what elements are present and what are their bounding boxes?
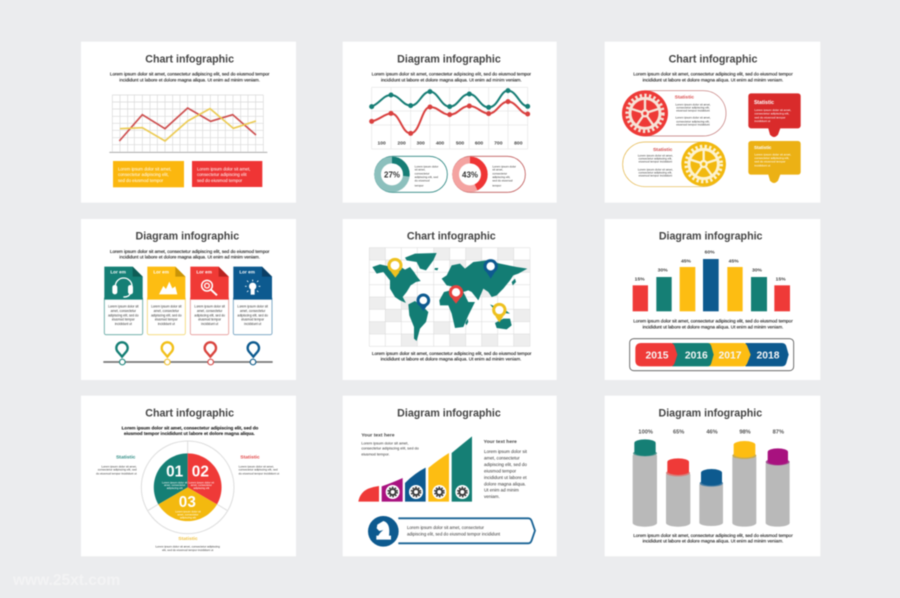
callout: red text box: sed do eiusmod tempor (197, 178, 243, 183)
segmented pie chart: amet, consectetur (191, 483, 212, 487)
cylinder chart: 46% (706, 429, 718, 435)
callout: yellow text box (113, 161, 184, 187)
card: red magnifier: Lorem ipsum dolor sit (194, 305, 225, 309)
card: teal headset: incididunt ut (115, 322, 132, 326)
card: blue light bulb: adipiscing elit, sed do (237, 313, 268, 317)
map pin: blue south america (418, 295, 429, 311)
card: red magnifier (190, 267, 229, 335)
text block: left (361, 433, 419, 456)
text block: right: Your text here (484, 439, 517, 445)
callout: red speech box: Lorem ipsum dolor sit amet, (754, 108, 791, 112)
donut pill: 27%: consectetur (415, 171, 429, 175)
intro text (633, 533, 793, 544)
card: blue light bulb: Lor em (239, 270, 255, 275)
card: teal headset: amet, consectetur (111, 309, 137, 313)
year timeline bar: 2017 (719, 351, 742, 362)
title: Diagram infographic (659, 408, 762, 420)
cylinder chart: 87% (773, 429, 784, 435)
donut pill: 43%: 43% (462, 171, 478, 180)
donut pill: 27%: 27% (384, 171, 400, 180)
statistic pill with yellow gear: eiusmod tempor incididunt (639, 160, 672, 164)
donut pill: 43%: adipiscing elit, (492, 175, 510, 179)
line chart (109, 95, 267, 152)
bar chart (633, 250, 790, 311)
stepped bars (358, 436, 472, 502)
intro text (633, 72, 793, 82)
callout: yellow text box: consectetur adipiscing elit, (118, 172, 169, 177)
card: blue light bulb (233, 267, 272, 335)
statistic pill with yellow gear: Lorem ipsum dolor sit amet, (638, 167, 673, 171)
card: blue light bulb: incididunt ut (244, 322, 261, 326)
bar chart: 45% (729, 259, 739, 265)
panel: bar chart and years slide (605, 219, 820, 380)
smooth line chart: 400 (436, 140, 444, 146)
callout: red text box: consectetur adipiscing elit (197, 172, 247, 177)
text pill with knight icon (368, 516, 535, 547)
statistic pill with yellow gear: Lorem ipsum dolor sit amet, (638, 154, 673, 158)
label: yellow statistic: Lorem ipsum dolor sit amet, consectetur adipiscing (155, 544, 220, 548)
cylinder chart: 65% (673, 429, 684, 435)
card: red magnifier: incididunt ut (201, 322, 218, 326)
card: blue light bulb: eiusmod tempor (241, 318, 265, 322)
timeline with pins (103, 342, 273, 365)
segmented pie chart: adipiscing elit (193, 486, 210, 490)
card: teal headset: eiusmod tempor (112, 318, 136, 322)
callout: yellow text box: Lorem ipsum dolor sit amet, (118, 166, 171, 171)
label: yellow statistic: elit, sed do eiusmod tempor incididunt ut (162, 548, 213, 552)
watermark: www.25xt.com (12, 572, 120, 589)
text block: right: dolore magna aliqua. (484, 481, 526, 486)
cylinder chart (633, 429, 790, 527)
card: red magnifier: Lor em (196, 270, 212, 275)
year timeline bar: 2018 (757, 351, 780, 362)
smooth line chart: 800 (514, 140, 523, 146)
text pill with knight icon: adipiscing elit, sed do eiusmod tempor incididunt (407, 532, 501, 537)
icon: chess knight (376, 521, 391, 540)
text block: right: Ut enim ad minim (484, 488, 519, 493)
donut pill: 43%: sed do eiusmod (492, 179, 513, 183)
intro text: incididunt ut labore et dolore magna aliqua. Ut enim ad minim veniam. (119, 77, 260, 82)
donut pill: 43%: Lorem ipsum dolor (492, 164, 516, 168)
segmented pie chart: 02 (192, 463, 209, 480)
smooth line chart: 600 (475, 140, 483, 146)
segmented pie chart: adipiscing elit (167, 486, 183, 490)
text block: right: eiusmod tempor (484, 468, 517, 473)
segmented pie chart: 03 (179, 494, 196, 511)
callout: yellow speech box: incididunt ut (754, 164, 770, 168)
text block: right: veniam. (484, 494, 500, 499)
label: teal statistic: do eiusmod tempor incididunt ut (96, 471, 137, 475)
text block: left: eiusmod tempor. (361, 452, 390, 456)
label: yellow statistic (155, 536, 220, 552)
label: yellow statistic: Statistic (178, 536, 198, 542)
bar chart: 15% (635, 276, 645, 282)
card: yellow mountain: adipiscing elit, sed do (151, 313, 182, 317)
icon: magnifier (202, 280, 217, 295)
donut pill: 27%: adipiscing elit, sed (415, 175, 438, 179)
panel: world map slide (343, 219, 557, 380)
intro text: Lorem ipsum dolor sit amet, consectetur adipiscing elit, sed do eiusmod tempor (372, 351, 532, 356)
text block: right: amet, consectetur (484, 456, 520, 461)
segmented pie chart: amet, consectetur (177, 512, 199, 516)
intro text (633, 319, 793, 329)
card: red magnifier: amet, consectetur (197, 309, 223, 313)
callout: red speech box: sed do eiusmod tempor (754, 115, 786, 119)
intro text (372, 72, 532, 82)
donut pill: 27%: tempor (415, 184, 424, 188)
panel: cylinder chart slide (605, 396, 820, 556)
text block: right: adipiscing elit, sed do (484, 462, 527, 467)
intro text: incididunt ut labore et dolore magna aliqua. Ut enim ad minim veniam. (381, 357, 521, 362)
segmented pie chart: Lorem ipsum dolor sit (175, 509, 201, 513)
card: yellow mountain: incididunt ut (158, 322, 175, 326)
smooth line chart: 300 (417, 140, 425, 146)
intro text: Lorem ipsum dolor sit amet, consectetur adipiscing elit, sed do eiusmod tempor (110, 249, 270, 254)
callout: red text box: Lorem ipsum dolor sit amet, (197, 166, 250, 171)
panel: gears and callouts slide (605, 42, 820, 203)
intro text: Lorem ipsum dolor sit amet, consectetur adipiscing elit, sed do eiusmod tempor (633, 319, 793, 324)
intro text: eiusmod tempor incididunt ut labore et dolore magna aliqua. (124, 431, 255, 436)
smooth line chart: 100 (378, 140, 386, 146)
intro text (372, 351, 532, 362)
smooth line chart: 200 (398, 140, 406, 146)
panel: stepped chart slide (343, 396, 557, 556)
icon: headset (113, 278, 132, 297)
panel: smooth line chart slide (343, 42, 557, 203)
callout: red speech box (748, 93, 801, 137)
donut pill: 27% (375, 156, 447, 192)
intro text: incididunt ut labore et dolore magna aliqua. Ut enim ad minim veniam. (381, 77, 522, 82)
text block: left: Lorem ipsum dolor sit amet, (361, 442, 409, 446)
donut pill: 27%: Lorem ipsum dolor (415, 164, 438, 168)
card: teal headset: Lor em (110, 270, 126, 275)
statistic pill with red gear: consectetur adipiscing elit, (676, 119, 710, 123)
text block: left: Your text here (361, 433, 395, 439)
title: Chart infographic (407, 231, 496, 243)
statistic pill with red gear: consectetur adipiscing elit, (676, 106, 710, 110)
intro text: incididunt ut labore et dolore magna aliqua. Ut enim ad minim veniam. (643, 324, 783, 329)
panel: line chart slide (81, 42, 296, 203)
card: teal headset: Lorem ipsum dolor sit (108, 305, 139, 309)
statistic pill with yellow gear (623, 142, 726, 187)
label: red statistic: Statistic (240, 455, 260, 461)
intro text (110, 72, 270, 82)
checkered map grid (369, 248, 530, 346)
callout: yellow speech box: consectetur adipiscing elit, (754, 156, 790, 160)
callout: yellow speech box: Statistic (754, 145, 772, 150)
statistic pill with red gear: eiusmod tempor incididunt (676, 122, 710, 126)
card: blue light bulb: amet, consectetur (240, 309, 266, 313)
intro text: Lorem ipsum dolor sit amet, consectetur adipiscing elit, sed do (122, 426, 259, 431)
intro text: incididunt ut labore et dolore magna aliqua. Ut enim ad minim veniam. (643, 77, 783, 82)
bar chart: 30% (658, 268, 668, 274)
muted cap rims (633, 450, 790, 487)
card: blue light bulb: Lorem ipsum dolor sit (237, 305, 268, 309)
statistic pill with red gear (622, 90, 726, 136)
statistic pill with red gear: Statistic (675, 95, 694, 101)
title: Diagram infographic (397, 408, 501, 420)
segmented pie chart (141, 441, 234, 534)
cylinder chart: 98% (739, 429, 751, 435)
label: red statistic: consectetur adipiscing elit, sed (239, 468, 278, 472)
world map (372, 253, 527, 341)
intro text: Lorem ipsum dolor sit amet, consectetur adipiscing elit, sed do eiusmod tempor (110, 72, 270, 77)
title: Chart infographic (669, 54, 757, 66)
card: yellow mountain: amet, consectetur (154, 309, 180, 313)
intro text: Lorem ipsum dolor sit amet, consectetur adipiscing elit, sed do eiusmod tempor (633, 72, 793, 77)
intro text (122, 426, 259, 436)
intro text (110, 249, 270, 259)
segmented pie chart: Lorem ipsum dolor sit (162, 480, 188, 484)
label: red statistic: Lorem ipsum dolor sit amet, (239, 464, 274, 468)
label: teal statistic: Lorem ipsum dolor sit amet, (101, 464, 137, 468)
title: Chart infographic (145, 408, 234, 420)
card: teal headset (104, 267, 143, 335)
card: red magnifier: eiusmod tempor (198, 318, 222, 322)
donut pill: 27%: sit amet, (415, 168, 426, 172)
smooth line chart (369, 87, 530, 149)
callout: yellow speech box (748, 141, 801, 183)
label: teal statistic (96, 455, 137, 475)
card: yellow mountain: Lor em (153, 270, 169, 275)
map pin: blue asia (485, 261, 496, 279)
segmented pie chart: amet, consectetur (164, 483, 185, 487)
label: red statistic (239, 455, 279, 475)
title: Diagram infographic (136, 231, 239, 243)
card: yellow mountain: eiusmod tempor (155, 318, 179, 322)
icon: mountain (159, 282, 177, 294)
title: Diagram infographic (397, 54, 501, 66)
callout: yellow speech box: sed do eiusmod tempor (754, 160, 786, 164)
year timeline bar (630, 339, 794, 371)
label: red statistic: do eiusmod tempor incididunt ut (239, 471, 279, 475)
text block: right (484, 439, 528, 499)
card: red magnifier: adipiscing elit, sed do (194, 313, 225, 317)
segmented pie chart: Lorem ipsum dolor sit (189, 480, 214, 484)
statistic pill with red gear: Lorem ipsum dolor sit amet, (675, 103, 711, 107)
card: teal headset: adipiscing elit, sed do (108, 313, 139, 317)
label: teal statistic: Statistic (116, 455, 136, 461)
statistic pill with yellow gear: Statistic (653, 147, 673, 153)
callout: red text box (192, 161, 262, 187)
segmented pie chart: adipiscing elit (180, 515, 196, 519)
intro text: incididunt ut labore et dolore magna aliqua. Ut enim ad minim veniam. (643, 539, 783, 544)
panel: icon cards and timeline slide (81, 219, 296, 380)
donut pill: 43% (453, 156, 525, 192)
card: yellow mountain (147, 267, 185, 335)
bar chart: 15% (776, 276, 786, 282)
statistic pill with yellow gear: eiusmod tempor incididunt (639, 174, 672, 178)
icons: gears (386, 485, 469, 499)
year timeline bar: 2016 (685, 351, 708, 362)
gray cylinder bodies (633, 452, 790, 527)
text block: left: consectetur adipiscing elit, sed do (361, 447, 419, 451)
callout: yellow speech box: Lorem ipsum dolor sit amet, (754, 152, 791, 156)
statistic pill with red gear: Lorem ipsum dolor sit amet, (675, 116, 711, 120)
smooth line chart: 700 (494, 140, 503, 146)
segmented pie chart: 01 (166, 464, 184, 481)
text block: right: Lorem ipsum dolor sit (484, 449, 528, 454)
text pill with knight icon: Lorem ipsum dolor sit amet, consectetur (407, 525, 485, 530)
label: teal statistic: consectetur adipiscing elit, sed (98, 468, 137, 472)
intro text: Lorem ipsum dolor sit amet, consectetur adipiscing elit, sed do eiusmod tempor (372, 72, 532, 77)
title: Chart infographic (145, 54, 234, 66)
intro text: incididunt ut labore et dolore magna aliqua. Ut enim ad minim veniam. (119, 254, 260, 259)
bar chart: 45% (681, 259, 692, 265)
donut pill: 43%: tempor (492, 184, 501, 188)
card: yellow mountain: Lorem ipsum dolor sit (151, 305, 182, 309)
statistic pill with yellow gear: consectetur adipiscing elit, (639, 170, 672, 174)
panel: pie diagram slide (81, 396, 296, 556)
title: Diagram infographic (659, 231, 763, 243)
bar chart: 60% (705, 250, 715, 256)
donut pill: 27%: do eiusmod (415, 179, 430, 183)
map pin: yellow north america (389, 259, 401, 278)
intro text: Lorem ipsum dolor sit amet, consectetur adipiscing elit, sed do eiusmod tempor (633, 533, 793, 538)
smooth line chart: 500 (456, 140, 464, 146)
donut pill: 43%: consectetur (492, 171, 507, 175)
callout: red speech box: Statistic (754, 100, 774, 106)
callout: yellow text box: sed do eiusmod tempor (118, 178, 164, 183)
donut pill: 43%: sit amet, (492, 168, 503, 172)
callout: red speech box: incididunt ut (754, 119, 770, 123)
map pin: yellow australia (494, 304, 505, 322)
text block: right: incididunt ut labore et (484, 475, 527, 480)
year timeline bar: 2015 (646, 351, 669, 362)
map pin: red africa (450, 287, 462, 304)
callout: red speech box: consectetur adipiscing elit, (754, 112, 790, 116)
statistic pill with red gear: eiusmod tempor incididunt (676, 109, 710, 113)
cylinder chart: 100% (638, 429, 653, 435)
icon: light bulb (245, 280, 260, 295)
statistic pill with yellow gear: consectetur adipiscing elit, (639, 156, 672, 160)
bar chart: 30% (752, 268, 763, 274)
